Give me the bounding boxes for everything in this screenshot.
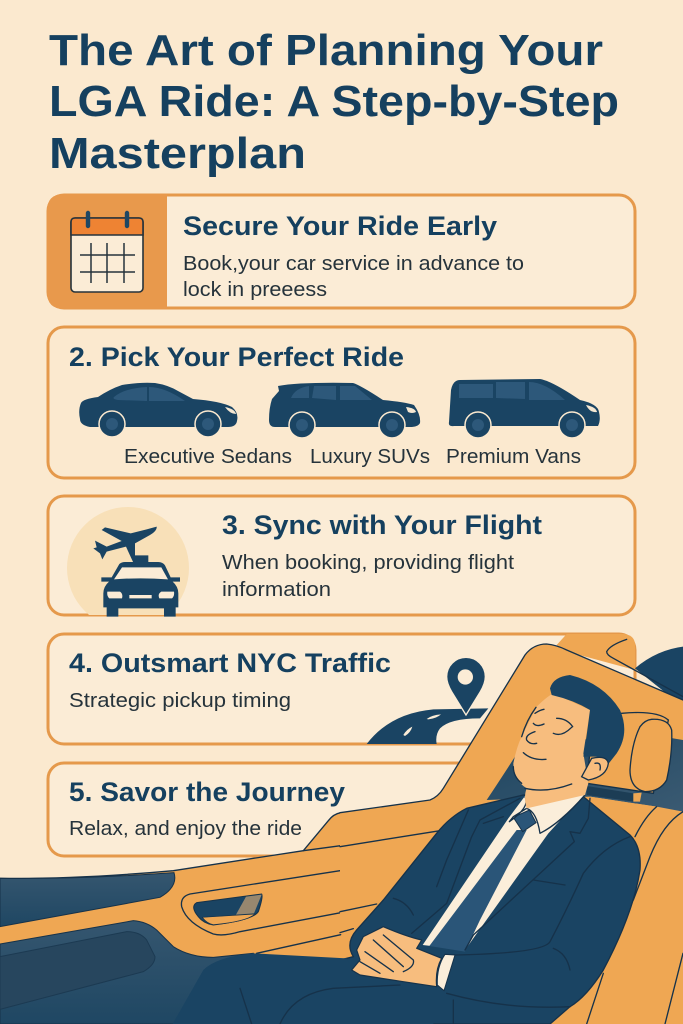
panel: step 5 savor the journey <box>48 763 635 856</box>
icon: calendar <box>71 213 143 292</box>
title: LGA Ride: A Step-by-Step <box>49 77 619 126</box>
heading: step 4: 4. Outsmart NYC Traffic <box>69 648 391 678</box>
interior behind head <box>487 730 683 812</box>
suit <box>340 795 640 1024</box>
icon: plane above car <box>67 507 189 629</box>
headrest <box>587 712 672 802</box>
seat outlines <box>340 639 683 933</box>
text: step 3 description: When booking, providing flight <box>222 551 514 574</box>
text: step 1 description: Book,your car service in advance to <box>183 252 524 275</box>
title <box>49 26 619 178</box>
illustration: relaxed passenger in seat <box>340 634 683 1024</box>
heading: step 5: 5. Savor the Journey <box>69 777 345 807</box>
icon: road with location pin <box>367 657 488 744</box>
panel: step 3 sync with flight <box>48 496 635 629</box>
text: step 3 description <box>222 551 514 601</box>
heading: step 1: Secure Your Ride Early <box>183 211 497 241</box>
tie <box>429 830 527 952</box>
panel: step 1 secure your ride <box>47 194 635 309</box>
text: step 3 description: information <box>222 578 331 601</box>
panel: step 2 pick your ride <box>48 327 635 478</box>
text: step 1 description <box>183 252 524 301</box>
seat pillar <box>340 644 683 1024</box>
labels: vehicle types: Premium Vans <box>446 445 581 468</box>
text: step 1 description: lock in preeess <box>183 278 327 301</box>
seat top tab <box>557 634 635 670</box>
shirt cuff <box>437 954 455 991</box>
icon: van <box>449 379 600 438</box>
illustration: car door <box>0 804 400 1024</box>
seat back lower <box>547 797 657 1024</box>
clasped hands <box>352 927 442 987</box>
title: Masterplan <box>49 129 306 178</box>
illustration: passenger legs <box>173 953 433 1024</box>
labels: vehicle types <box>124 445 581 468</box>
title: The Art of Planning Your <box>49 26 603 75</box>
icon: suv <box>269 383 420 438</box>
heading: step 2: 2. Pick Your Perfect Ride <box>69 342 404 372</box>
text: step 4 description: Strategic pickup timing <box>69 689 291 712</box>
collar and lapels <box>509 795 585 833</box>
heading: step 3: 3. Sync with Your Flight <box>222 510 542 540</box>
dark window at right <box>635 647 683 707</box>
icon: sedan <box>79 383 237 437</box>
labels: vehicle types: Luxury SUVs <box>310 445 430 468</box>
panel: step 4 outsmart traffic <box>48 634 635 744</box>
labels: vehicle types: Executive Sedans <box>124 445 292 468</box>
head <box>513 675 624 808</box>
text: step 5 description: Relax, and enjoy the ride <box>69 817 302 840</box>
shirt <box>423 795 583 950</box>
